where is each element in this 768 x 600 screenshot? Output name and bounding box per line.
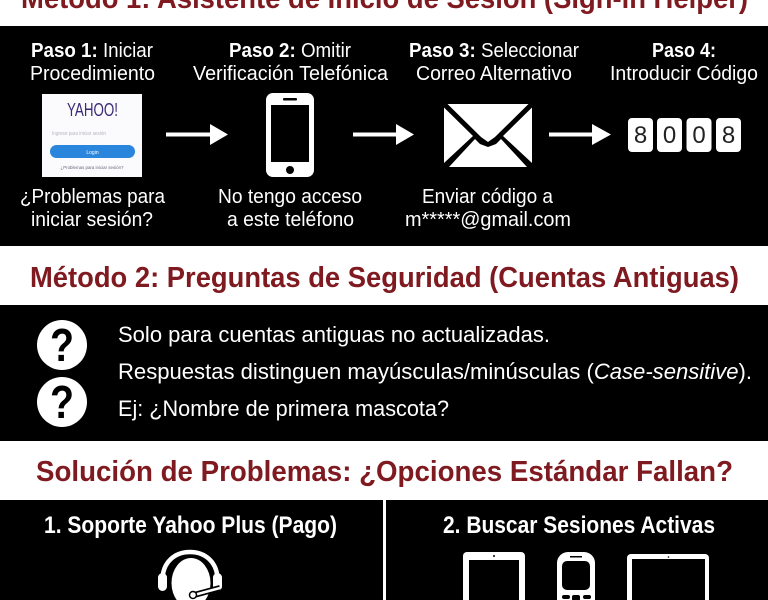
icon: question mark 2 [37,376,87,428]
icon: feature phone [557,552,595,600]
step 1 caption: ¿Problemas para [20,186,166,208]
panel: buscar sesiones activas [386,500,768,600]
step 3 heading: Paso 3: Seleccionar [409,40,579,62]
icon: question mark 1 [37,319,87,371]
icon: yahoo login card: Ingrese para iniciar sesión [52,131,106,137]
step 2 heading: Verificación Telefónica [193,63,389,85]
step 3 heading [409,40,579,85]
icon: yahoo login card: YAHOO! [67,100,118,120]
heading: solución de problemas: Solución de Problemas: ¿Opciones Estándar Fallan? [36,456,733,488]
step 1 heading: Procedimiento [30,63,155,85]
icon: envelope [444,104,532,167]
arrow 3 [549,124,611,145]
step 2 caption [218,186,362,231]
step 1 heading [30,40,155,85]
icon: question mark 1: ? [50,319,74,371]
security question notes [118,322,752,421]
icon: question mark 2: ? [50,376,74,428]
icon: yahoo login card: ¿Problemas para iniciar sesión? [60,165,124,170]
step 2 caption: a este teléfono [227,209,354,231]
subheading 2: 2. Buscar Sesiones Activas [443,512,715,539]
security question notes: Ej: ¿Nombre de primera mascota? [118,396,449,421]
icon: large tablet [627,554,709,600]
step 1 heading: Paso 1: Iniciar [31,40,153,62]
step 2 heading: Paso 2: Omitir [229,40,351,62]
step 1 caption: iniciar sesión? [31,209,153,231]
subheading 1: 1. Soporte Yahoo Plus (Pago) [44,512,337,539]
step 4 heading: Paso 4: [652,40,716,62]
code tiles 8008: 0 [692,122,706,149]
step 4 heading: Introducir Código [610,63,758,85]
icon: smartphone [266,93,314,177]
arrow 1 [166,124,228,145]
step 2 caption: No tengo acceso [218,186,362,208]
step 4 heading [610,40,758,85]
step 1 caption [20,186,166,231]
step 3 caption: m*****@gmail.com [405,209,571,231]
step 2 heading [193,40,389,85]
code tiles 8008 [628,118,741,152]
heading: método 2: Método 2: Preguntas de Seguridad (Cuentas Antiguas) [30,262,739,294]
panel: método 1 steps [0,26,768,246]
icon: headset [158,552,222,600]
code tiles 8008: 8 [634,122,647,149]
panel: soporte yahoo plus [0,500,383,600]
panel: método 2 [0,305,768,441]
code tiles 8008: 8 [722,122,735,149]
security question notes: Solo para cuentas antiguas no actualizadas. [118,322,550,347]
step 3 caption [405,186,571,231]
arrow 2 [353,124,414,145]
icon: tablet [463,552,525,600]
step 3 caption: Enviar código a [422,186,554,208]
step 3 heading: Correo Alternativo [416,63,572,85]
icon: yahoo login card [42,94,142,177]
code tiles 8008: 0 [663,122,676,149]
icon: yahoo login card: Login [86,150,99,156]
security question notes: Respuestas distinguen mayúsculas/minúsculas (Case-sensitive). [118,359,752,384]
